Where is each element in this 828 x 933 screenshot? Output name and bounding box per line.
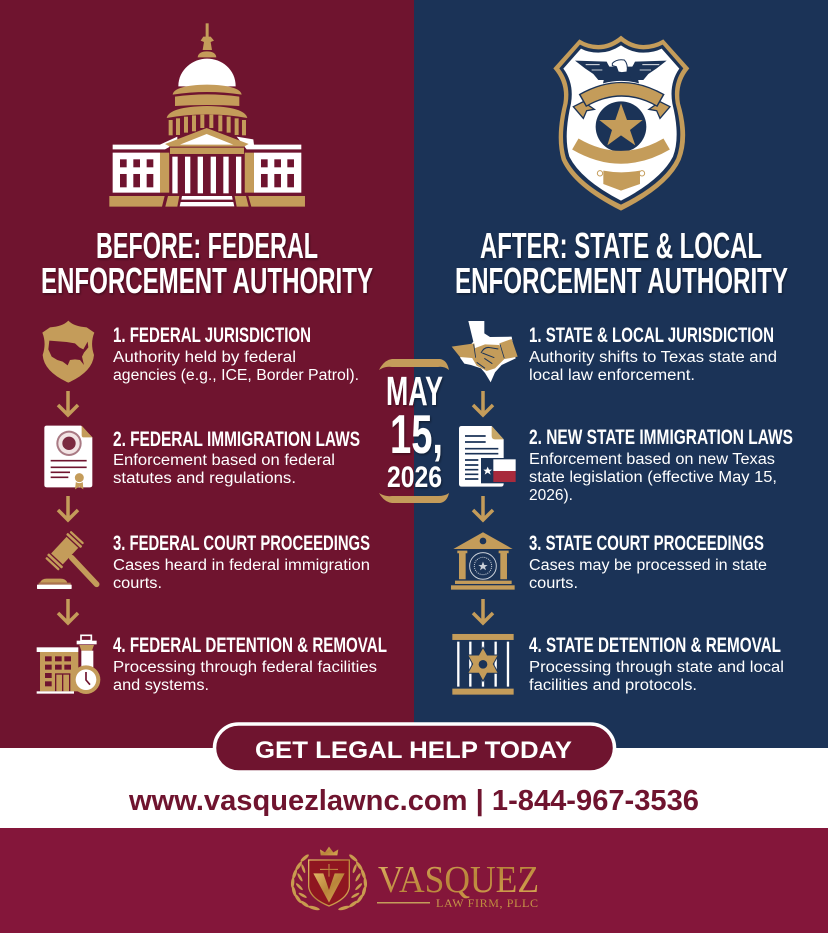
logo: Vasquez Law Firm — [291, 847, 539, 911]
icon: federal document with seal — [44, 426, 92, 489]
arrow: step 2 to 3 — [58, 496, 78, 520]
date badge: May 15, 2026: 15, — [390, 403, 443, 465]
heading: after state and local enforcement authority — [455, 225, 788, 301]
step 1: federal jurisdiction — [113, 323, 359, 384]
step 2: new state immigration laws — [529, 425, 793, 504]
logo emblem: crown, shield and wreath — [291, 847, 367, 911]
date badge: May 15, 2026: MAY — [386, 368, 443, 414]
step 2: new state immigration laws: 2026). — [529, 487, 573, 504]
step 3: federal court proceedings: courts. — [113, 575, 162, 592]
step 4: federal detention and removal: Processing through federal facilities — [113, 659, 377, 676]
icon: jail bars with sheriff star — [452, 634, 514, 695]
step 2: federal immigration laws: Enforcement based on federal — [113, 452, 335, 469]
contact line: website and phone: www.vasquezlawnc.com | 1-844-967-3536 — [128, 785, 699, 817]
step 4: federal detention and removal — [113, 633, 387, 694]
step 1: state and local jurisdiction: Authority shifts to Texas state and — [529, 349, 777, 366]
arrow: state step 2 to 3 — [473, 496, 493, 520]
step 4: state detention and removal: Processing through state and local — [529, 659, 784, 676]
icon: capitol building — [109, 23, 305, 207]
panel: after (state and local) background — [414, 0, 828, 750]
arrow: step 1 to 2 — [58, 391, 78, 415]
call to action button: GET LEGAL HELP TODAY — [255, 737, 572, 764]
arrow: state step 3 to 4 — [473, 599, 493, 623]
heading: before federal enforcement authority — [41, 225, 373, 301]
logo: Vasquez Law Firm: LAW FIRM, PLLC — [436, 896, 538, 910]
step 4: federal detention and removal: and systems. — [113, 677, 209, 694]
heading: before federal enforcement authority: ENFORCEMENT AUTHORITY — [41, 260, 373, 301]
step 1: state and local jurisdiction: local law enforcement. — [529, 367, 695, 384]
step 4: state detention and removal: facilities and protocols. — [529, 677, 697, 694]
step 2: federal immigration laws: statutes and regulations. — [113, 470, 296, 487]
step 1: state and local jurisdiction — [529, 323, 777, 384]
step 2: federal immigration laws — [113, 427, 360, 487]
icon: shield with US map — [42, 321, 94, 383]
step 3: federal court proceedings — [113, 531, 370, 592]
step 3: federal court proceedings: Cases heard in federal immigration — [113, 557, 370, 574]
arrow: state step 1 to 2 — [473, 391, 493, 415]
icon: detention building with clock — [37, 635, 100, 694]
icon: gavel — [37, 530, 97, 589]
date badge: May 15, 2026: 2026 — [387, 461, 442, 494]
icon: state courthouse with seal — [451, 532, 515, 590]
step 3: state court proceedings — [529, 531, 767, 592]
step 1: federal jurisdiction: 1. FEDERAL JURISDICTION — [113, 323, 311, 347]
call to action button — [214, 724, 614, 772]
step 3: state court proceedings: Cases may be processed in state — [529, 557, 767, 574]
arrow: step 3 to 4 — [58, 599, 78, 623]
heading: before federal enforcement authority: BEFORE: FEDERAL — [96, 225, 318, 266]
step 3: federal court proceedings: 3. FEDERAL COURT PROCEEDINGS — [113, 531, 370, 555]
step 3: state court proceedings: courts. — [529, 575, 578, 592]
step 4: state detention and removal — [529, 633, 784, 694]
panel: before (federal) background — [0, 0, 414, 750]
step 2: new state immigration laws: state legislation (effective May 15, — [529, 469, 777, 486]
icon: state document with Texas flag — [459, 426, 517, 487]
step 2: new state immigration laws: Enforcement based on new Texas — [529, 451, 775, 468]
date badge: May 15, 2026 — [379, 359, 449, 503]
icon: Texas outline with handshake — [452, 321, 518, 382]
footer band background — [0, 828, 828, 933]
icon: police badge with eagle and star — [553, 36, 689, 211]
logo wordmark: VASQUEZ — [378, 859, 539, 901]
step 1: federal jurisdiction: Authority held by federal — [113, 349, 296, 366]
step 1: federal jurisdiction: agencies (e.g., ICE, Border Patrol). — [113, 367, 359, 384]
step 2: federal immigration laws: 2. FEDERAL IMMIGRATION LAWS — [113, 427, 360, 451]
step 4: federal detention and removal: 4. FEDERAL DETENTION & REMOVAL — [113, 633, 387, 657]
contact band background — [0, 748, 828, 828]
